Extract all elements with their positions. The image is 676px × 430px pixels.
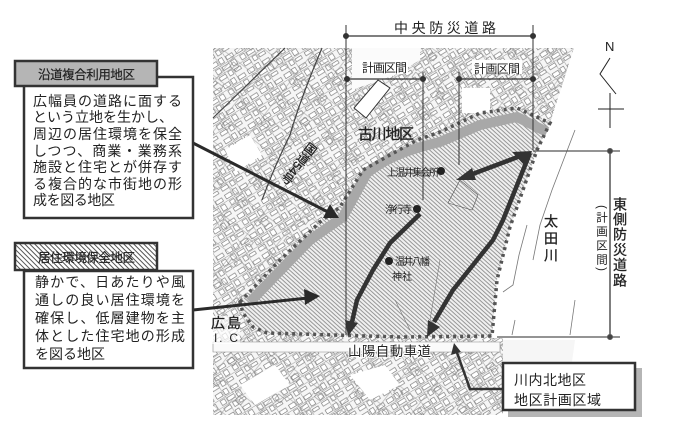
panel: Kawauchi-kita planning area	[503, 363, 642, 417]
panel text: residential environment conservation zone: 体とした住宅地の形成	[35, 328, 185, 344]
panel text: residential environment conservation zone	[35, 274, 185, 362]
landmark: Nukui Hachiman shrine	[385, 255, 430, 283]
panel text: residential environment conservation zone: 確保し、低層建物を主	[35, 310, 185, 326]
panel text: roadside mixed-use zone: 周辺の居住環境を保全	[33, 126, 182, 142]
landmark: Kami-nukui meeting hall: 上温井集会所	[387, 166, 439, 179]
panel heading: roadside mixed-use zone: 沿道複合利用地区	[38, 67, 135, 82]
panel text: roadside mixed-use zone: る複合的な市街地の形	[33, 176, 182, 192]
panel: residential environment conservation zone	[15, 243, 193, 368]
label: Hiroshima IC	[210, 315, 241, 345]
planning section dimension lines	[344, 72, 536, 200]
landmark: Nukui Hachiman shrine: 神社	[392, 270, 412, 283]
leader arrow: to mixed-use zone	[193, 143, 339, 218]
landmark: Jogyo temple: 浄行寺	[385, 203, 412, 216]
panel heading: roadside mixed-use zone	[15, 61, 157, 86]
panel: roadside mixed-use zone	[15, 61, 193, 218]
panel text: roadside mixed-use zone	[33, 93, 182, 208]
zone boundary dotted line	[240, 108, 550, 337]
label: planning section vertical: (計画区間)	[595, 205, 608, 271]
label: Ota River: 太田川	[543, 214, 559, 262]
panel heading: residential environment conservation zone	[15, 243, 157, 270]
Chuo disaster road dimension line	[344, 25, 536, 335]
panel: Kawauchi-kita planning area: 川内北地区	[514, 372, 586, 388]
panel text: roadside mixed-use zone: という立地を生かし、	[33, 109, 173, 125]
arrows: disaster road alignments	[352, 153, 530, 322]
label: National Route 54: 国道54号	[278, 140, 320, 188]
label: Chuo disaster road: 中央防災道路	[394, 20, 496, 36]
panel text: roadside mixed-use zone: 広幅員の道路に面する	[33, 93, 182, 109]
arrowheads	[345, 151, 532, 337]
landmark: Nukui Hachiman shrine: 温井八幡	[395, 255, 430, 268]
panel text: residential environment conservation zone: 通しの良い居住環境を	[35, 292, 185, 308]
panel text: roadside mixed-use zone: 成を図る地区	[33, 192, 115, 208]
East disaster road dimension line	[497, 148, 620, 340]
district area: Kawauchi-kita planning zone	[240, 108, 550, 337]
label: planning section left: 計画区間	[362, 60, 407, 75]
panel: Kawauchi-kita planning area: 地区計画区域	[514, 392, 601, 408]
north arrow: N	[605, 39, 614, 54]
river: Ota River bank lines	[503, 130, 575, 335]
label: planning section right: 計画区間	[474, 61, 520, 76]
leader arrow: to planning boundary	[451, 343, 503, 389]
north arrow	[598, 39, 624, 128]
label: Sanyo Expressway: 山陽自動車道	[348, 344, 432, 359]
landmark dot: Kami-nukui meeting hall	[437, 167, 445, 175]
map: base street map	[213, 48, 575, 415]
label: Furukawa district: 古川地区	[358, 126, 414, 143]
panel text: residential environment conservation zone: を図る地区	[35, 346, 105, 362]
panel text: roadside mixed-use zone: 施設と住宅とが併存す	[33, 159, 182, 175]
label: Hiroshima IC: I. C	[214, 331, 238, 345]
label: Hiroshima IC: 広島	[211, 315, 241, 331]
panel heading: residential environment conservation zone: 居住環境保全地区	[38, 251, 135, 265]
label: East disaster road: 東側防災道路	[612, 197, 628, 287]
leader arrow: to residential zone	[193, 289, 320, 310]
roadside mixed-use band	[250, 117, 547, 302]
panel text: residential environment conservation zone: 静かで、日あたりや風	[35, 274, 185, 290]
landmark: Jogyo temple	[385, 203, 421, 216]
panel text: roadside mixed-use zone: しつつ、商業・業務系	[33, 143, 182, 159]
